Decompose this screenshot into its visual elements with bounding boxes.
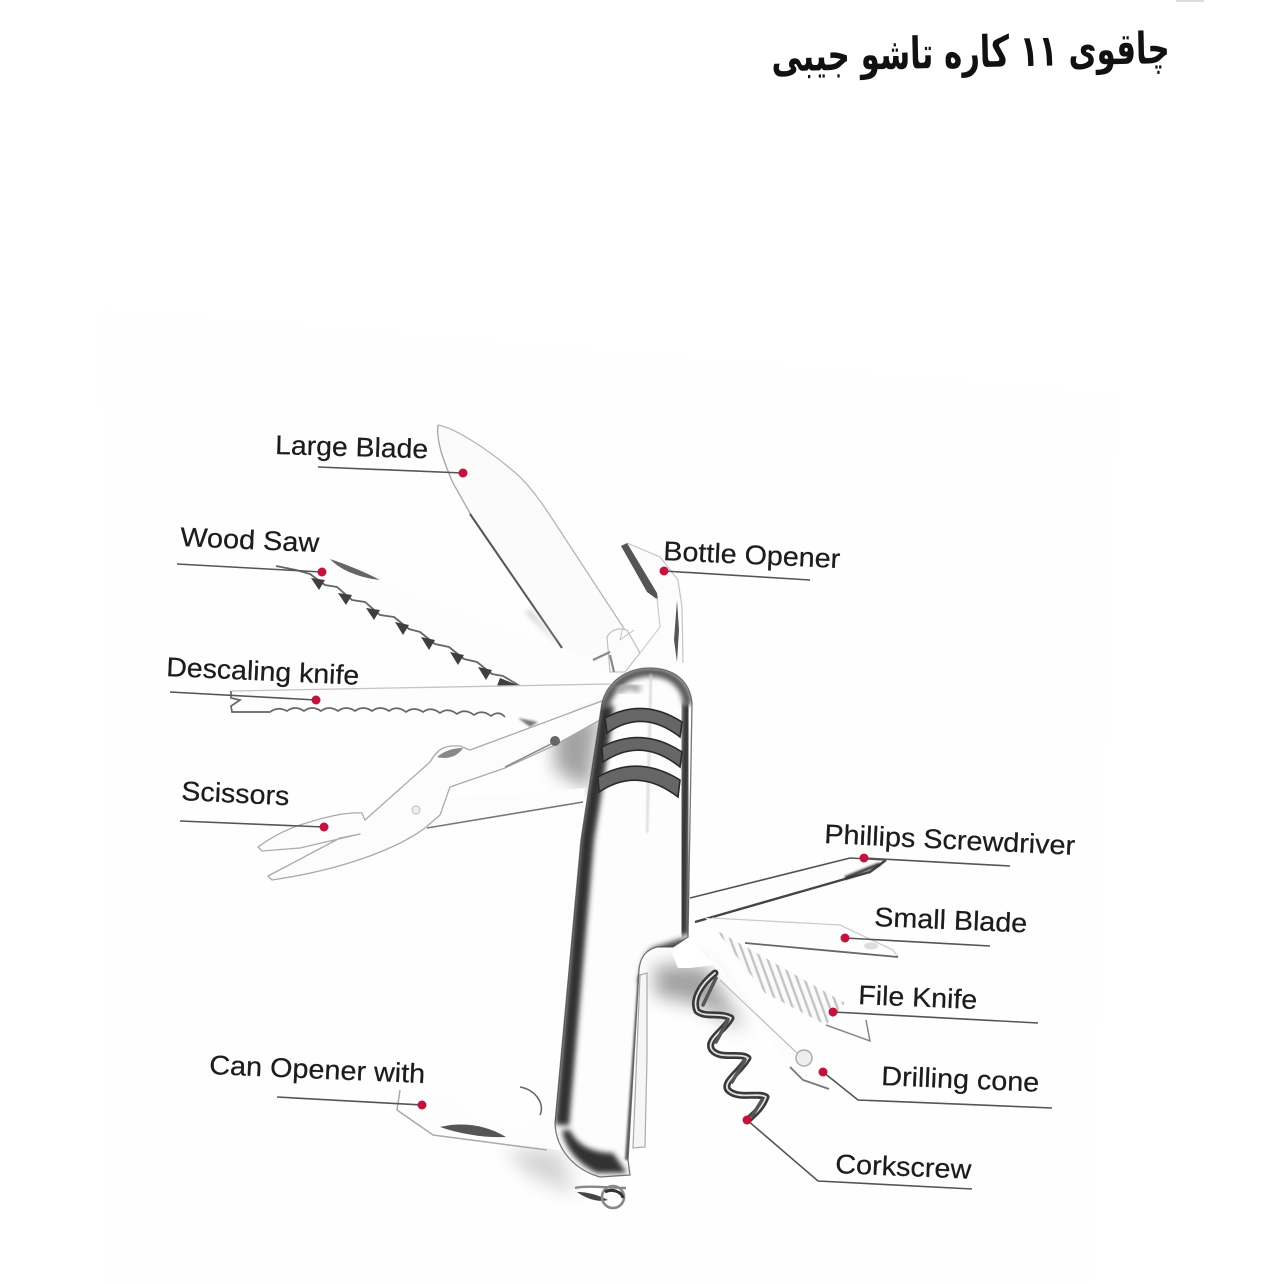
label: File Knife [828,980,1038,1023]
label: Can Opener with [209,1050,426,1110]
label: File Knife: File Knife [858,980,978,1015]
label: Descaling knife: Descaling knife [166,652,360,691]
knife side strip [633,973,647,1148]
scissors spring hole [550,736,560,746]
tool: drilling cone [693,927,830,1089]
tool: corkscrew [696,973,766,1120]
label: Drilling cone [818,1061,1052,1108]
illustration: multi-tool pocket knife diagram [168,0,1204,1210]
top corner mark [1176,0,1204,2]
label: Drilling cone: Drilling cone [881,1061,1040,1098]
label: Phillips Screwdriver: Phillips Screwdriver [824,819,1076,861]
label: Small Blade: Small Blade [874,902,1028,938]
saw slot [330,559,380,580]
label: Small Blade [840,902,1028,946]
knife handle [555,668,692,1177]
tool: scissors [258,698,610,880]
tool: wood saw [276,556,610,686]
label: Scissors: Scissors [181,776,290,811]
tool: large blade [438,425,640,672]
key ring [575,1186,626,1208]
tool: file knife [713,930,870,1041]
title: چاقوی ۱۱ کاره تاشو جیبی [771,23,1170,82]
tool: can opener [397,1078,560,1150]
notch tab [672,938,715,968]
tool: phillips screwdriver [690,856,887,922]
label: Wood Saw: Wood Saw [180,522,320,558]
tool: small blade [705,918,898,958]
label: Wood Saw [177,522,326,576]
label: Large Blade [275,430,468,478]
handle grip band 2 [602,738,682,767]
faint photo background [102,310,1115,1284]
knife shadows [505,712,745,1195]
handle grip band 1 [605,708,682,737]
label: Scissors [180,776,328,832]
label: Large Blade: Large Blade [275,430,429,464]
label: Corkscrew: Corkscrew [835,1149,972,1185]
label: Can Opener with: Can Opener with [209,1050,426,1089]
tool: bottle opener [593,543,683,672]
handle grip band 3 [598,766,680,797]
tool: descaling knife [230,684,612,727]
label: Corkscrew [742,1116,972,1189]
label: Bottle Opener: Bottle Opener [663,536,841,574]
label: Descaling knife [166,652,360,704]
